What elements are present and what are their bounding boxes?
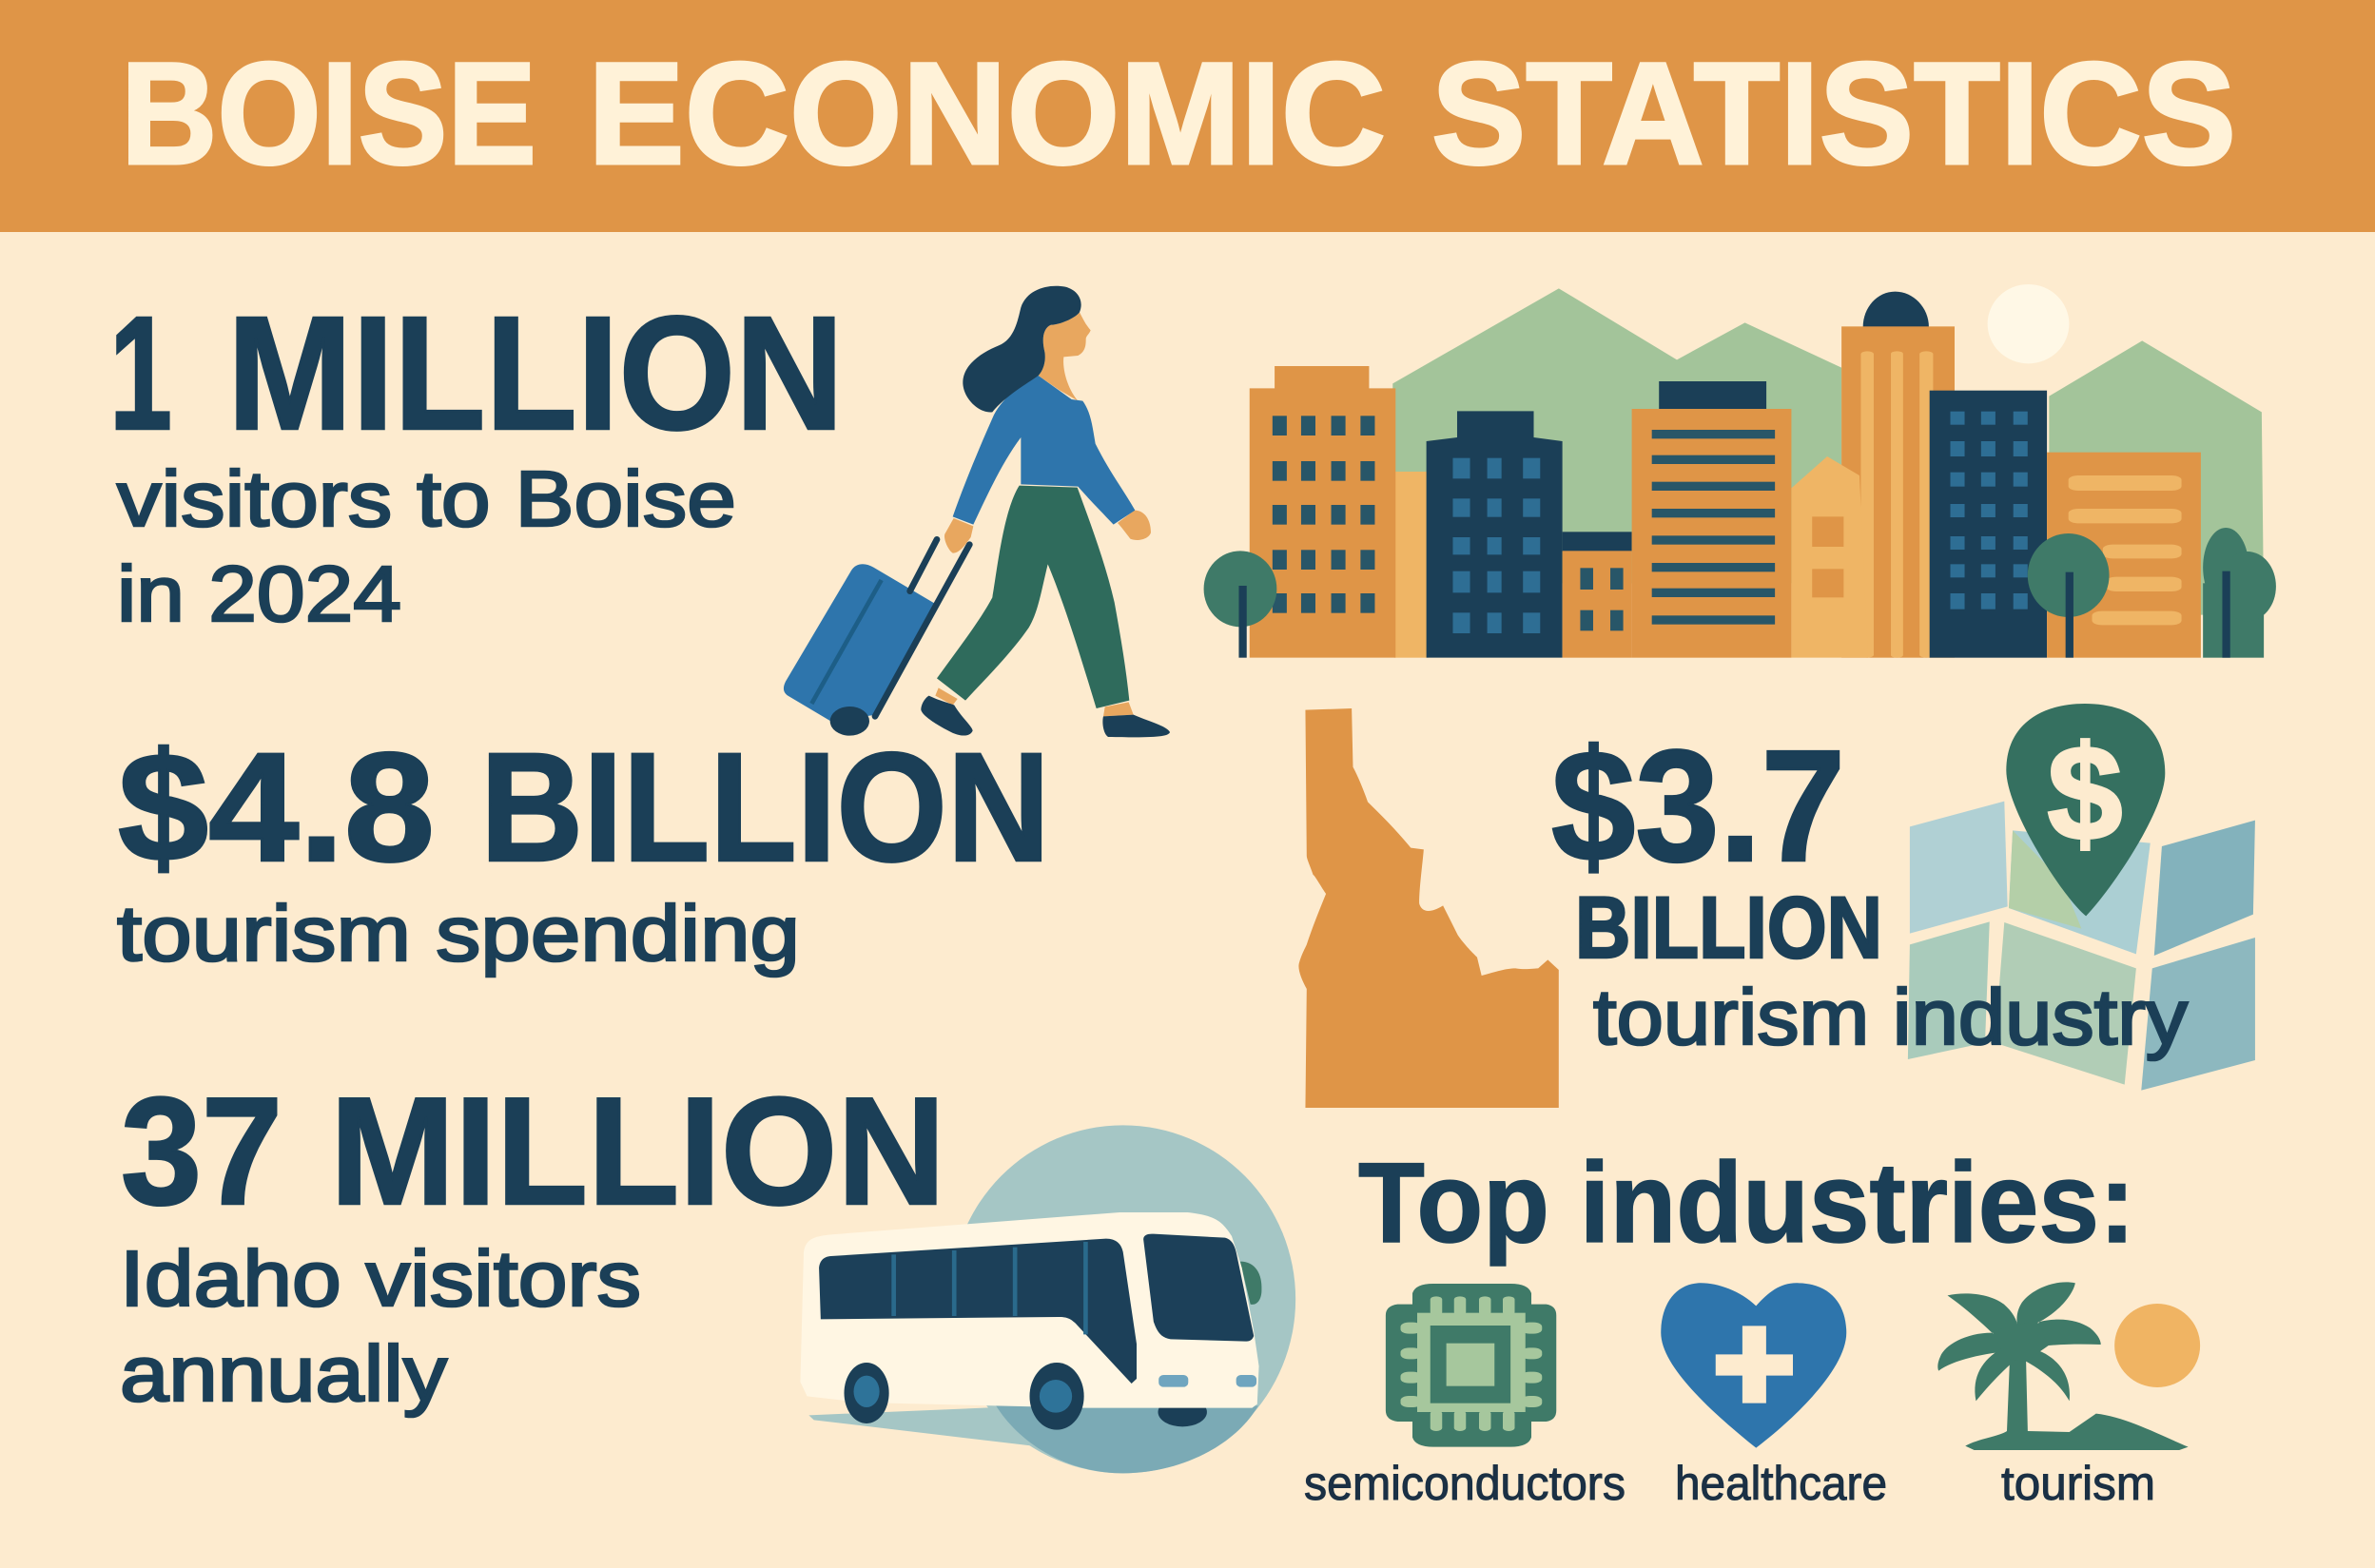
stat: 37 million Idaho visitors: 37 — [121, 1066, 282, 1237]
stat: 1 million visitors: in 2024 — [117, 550, 401, 638]
stat: 1 million visitors: 1 — [109, 283, 172, 464]
heading: top industries: Top industries: — [1358, 1139, 2135, 1267]
icon: Idaho state silhouette — [1298, 708, 1559, 1108]
label: tourism: tourism — [2001, 1457, 2155, 1510]
stat: 37 million Idaho visitors — [120, 1066, 945, 1418]
stat: $4.8 billion tourism spending: $4.8 — [118, 720, 435, 894]
stat: $4.8 billion tourism spending: tourism spending — [117, 889, 800, 978]
stat: 1 million visitors: MILLION — [227, 283, 844, 464]
stat: $3.7 billion tourism industry: tourism industry — [1593, 973, 2189, 1061]
icon: semiconductor chip — [1386, 1284, 1556, 1447]
stat: 37 million Idaho visitors: MILLION — [330, 1066, 945, 1237]
icon: healthcare heart — [1661, 1283, 1846, 1448]
stat: $3.7 billion tourism industry: $3.7 — [1551, 718, 1845, 895]
stat: 1 million visitors — [109, 283, 844, 638]
title — [121, 32, 2236, 195]
illustration: Boise city skyline — [1204, 284, 2276, 658]
title: ECONOMIC — [588, 32, 1386, 195]
header banner — [0, 0, 2375, 232]
stat: 37 million Idaho visitors: Idaho visitors — [120, 1234, 641, 1323]
icon: palm tree island and sun — [1937, 1282, 2200, 1450]
icon: map with dollar pin — [1908, 704, 2255, 1091]
title: BOISE — [121, 32, 536, 195]
stat: 1 million visitors: visitors to Boise — [117, 455, 736, 543]
label: healthcare: healthcare — [1675, 1457, 1887, 1510]
stat: $4.8 billion tourism spending: BILLION — [480, 720, 1050, 894]
stat: $3.7 billion tourism industry — [1551, 718, 2189, 1061]
stat: $4.8 billion tourism spending — [117, 720, 1050, 978]
label: semiconductors: semiconductors — [1304, 1457, 1626, 1510]
icon: map with dollar pin: $ — [2048, 718, 2122, 869]
title: STATISTICS — [1431, 32, 2236, 195]
stat: $3.7 billion tourism industry: BILLION — [1575, 880, 1882, 977]
icon: traveler with suitcase — [784, 286, 1170, 737]
icon: tour bus — [800, 1125, 1295, 1473]
stat: 37 million Idaho visitors: annually — [120, 1329, 448, 1418]
